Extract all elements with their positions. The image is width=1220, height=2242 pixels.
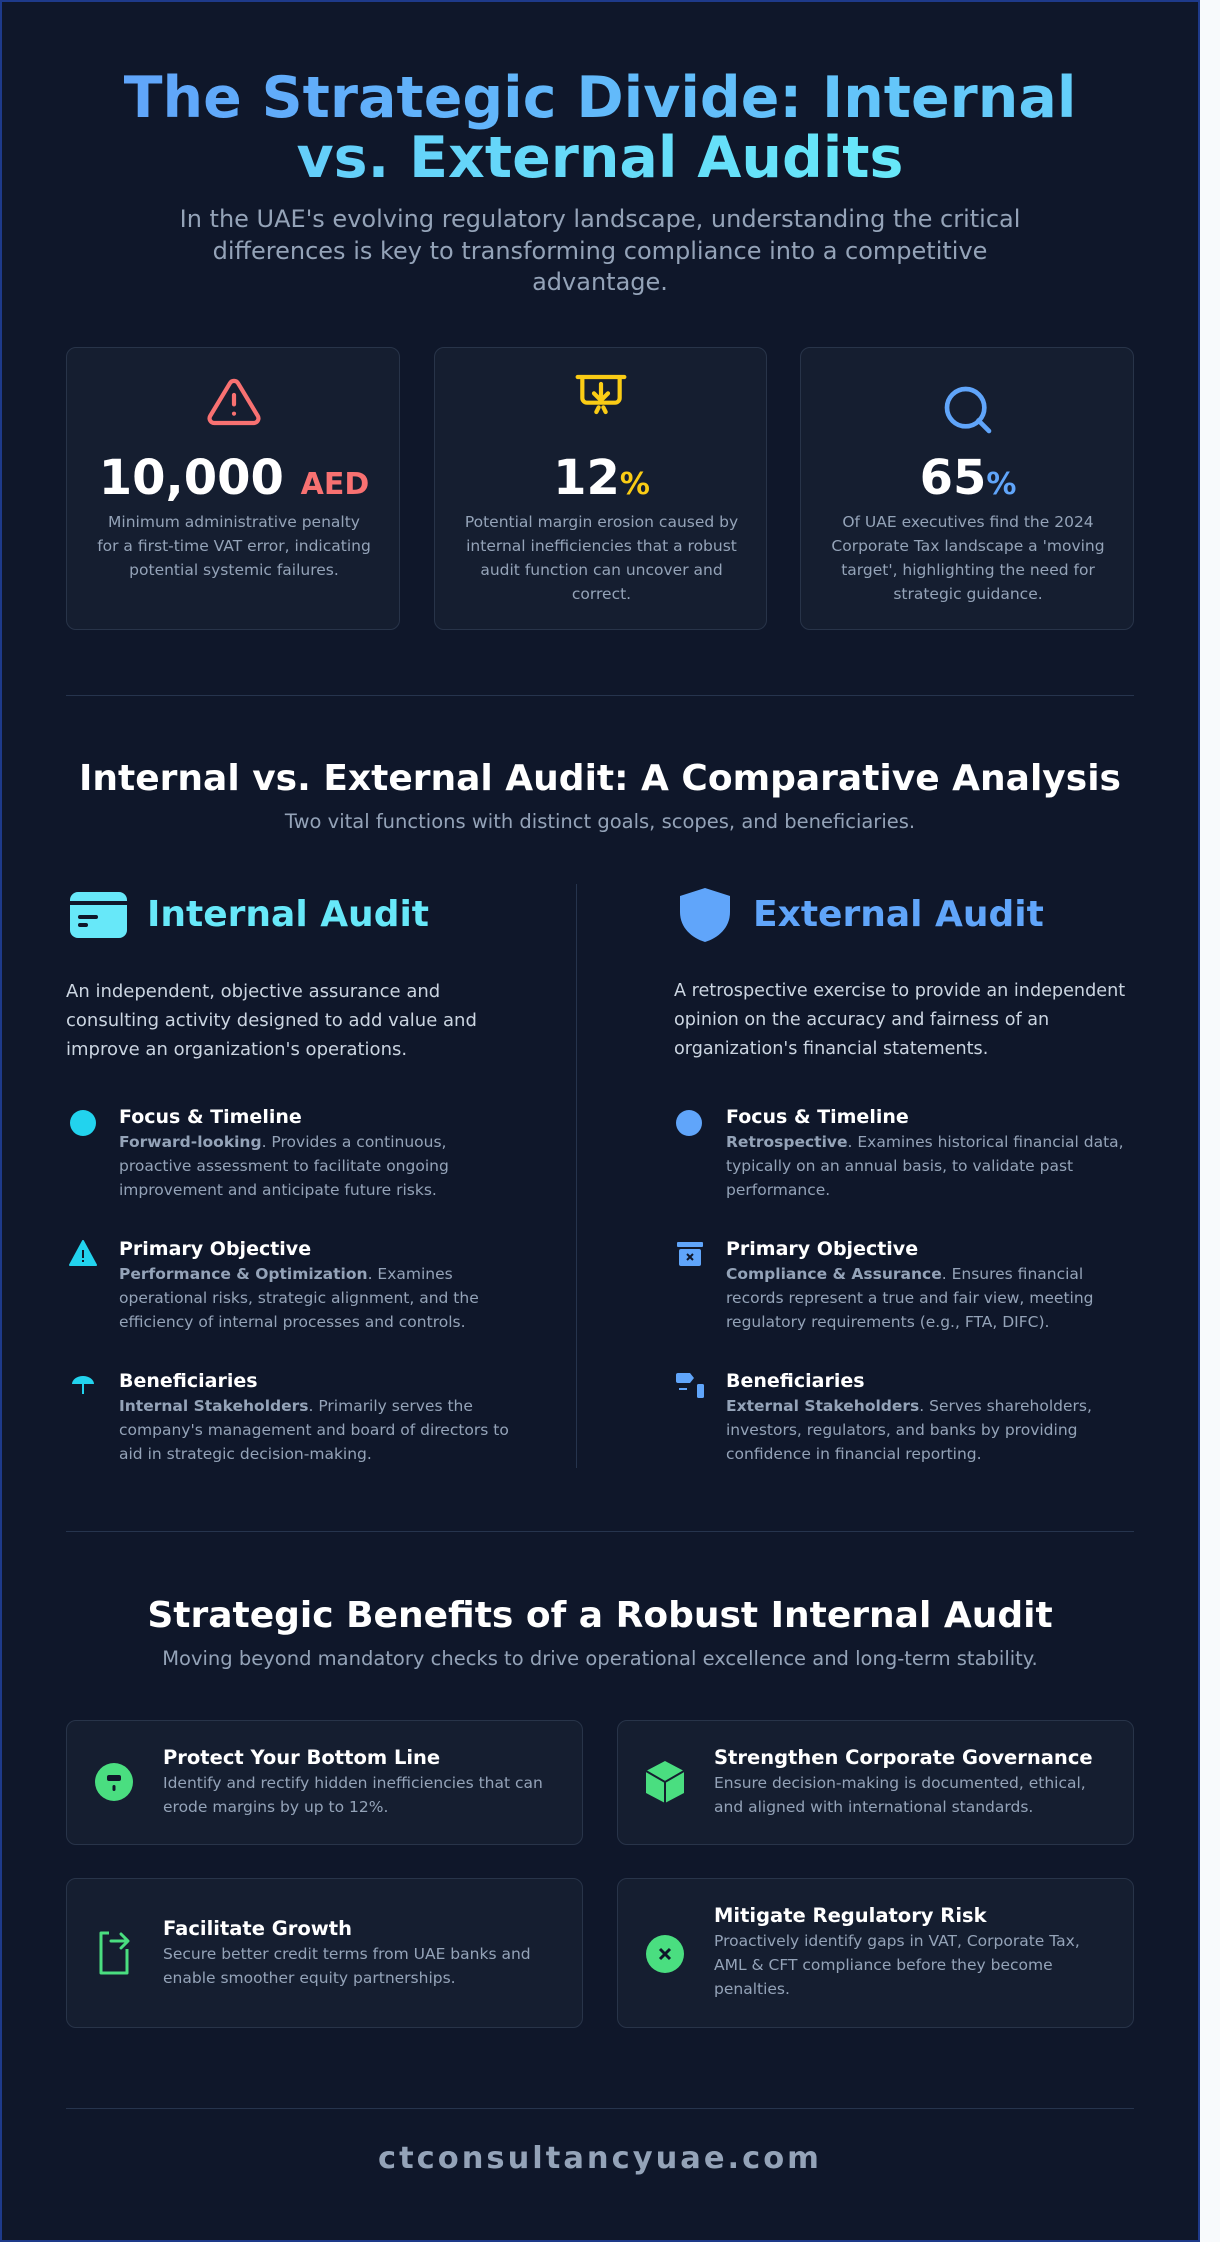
column: external audit (674, 888, 1125, 1463)
title: The Strategic Divide: Internal (124, 65, 1076, 131)
icon: card (70, 892, 127, 938)
benefit card: bottom line (66, 1720, 583, 1845)
stat card: 65% (800, 347, 1134, 630)
text (163, 1746, 543, 1816)
heading: Internal Audit (147, 894, 429, 935)
column: internal audit (66, 892, 509, 1463)
footer: website: ctconsultancyuae.com (378, 2141, 822, 2176)
number: 10,000 AED (99, 450, 369, 506)
text: Secure better credit terms from UAE banks and enable smoother equity partnerships. (163, 1945, 531, 1987)
number: 12% (553, 450, 650, 506)
icon: alert (69, 1240, 97, 1266)
text (163, 1917, 531, 1987)
text: Proactively identify gaps in VAT, Corporate Tax, AML & CFT compliance before they become penalties. (714, 1932, 1080, 1998)
item: objective: Performance & Optimization. Examines operational risks, strategic alignment, and the efficiency of internal processes and controls. (119, 1265, 479, 1331)
item: objective: Compliance & Assurance. Ensures financial records represent a true and fair view, meeting regulatory requirements (e.g., FTA, DIFC). (726, 1265, 1094, 1331)
number: 65% (920, 450, 1016, 506)
section subheading: Two vital functions with distinct goals, scopes, and beneficiaries. (285, 810, 915, 833)
description: Minimum administrative penalty for a first-time VAT error, indicating potential systemic failures. (97, 513, 371, 579)
benefit card: regulatory risk (617, 1878, 1134, 2028)
item: objective: Primary Objective (726, 1238, 918, 1260)
icon: magnifier (944, 386, 992, 434)
text: Protect Your Bottom Line (163, 1746, 440, 1769)
icon: exit (100, 1932, 130, 1974)
text: Ensure decision-making is documented, ethical, and aligned with international standards. (714, 1774, 1086, 1816)
item: beneficiaries: External Stakeholders. Serves shareholders, investors, regulators, and banks by providing confidence in financial reporting. (726, 1397, 1092, 1463)
stat card: 10,000 AED (66, 347, 400, 630)
icon: dot (676, 1110, 702, 1136)
icon: umbrella (72, 1376, 94, 1394)
section heading: comparison: Internal vs. External Audit: A Comparative Analysis (79, 758, 1121, 799)
subtitle: In the UAE's evolving regulatory landscape, understanding the critical differences is key to transforming compliance into a competitive advantage. (180, 205, 1020, 296)
text: Facilitate Growth (163, 1917, 352, 1940)
description: A retrospective exercise to provide an independent opinion on the accuracy and fairness of an organization's financial statements. (674, 981, 1125, 1059)
icon: green circle (95, 1763, 133, 1801)
description: An independent, objective assurance and consulting activity designed to add value and improve an organization's operations. (66, 981, 477, 1060)
section heading: benefits: Strategic Benefits of a Robust Internal Audit (147, 1595, 1053, 1636)
text (714, 1746, 1093, 1816)
item: beneficiaries: Beneficiaries (726, 1370, 865, 1392)
title: vs. External Audits (297, 125, 903, 191)
icon: archive (677, 1242, 703, 1266)
icon: dot (70, 1110, 96, 1136)
heading: External Audit (753, 894, 1044, 935)
description: Of UAE executives find the 2024 Corporate Tax landscape a 'moving target', highlighting the need for strategic guidance. (831, 513, 1105, 603)
item: beneficiaries: Internal Stakeholders. Primarily serves the company's management and board of directors to aid in strategic decision-making. (119, 1397, 509, 1463)
item: focus: Focus & Timeline (119, 1106, 302, 1128)
icon: warning triangle (207, 378, 261, 426)
stat card: 12% (434, 347, 767, 630)
text: Mitigate Regulatory Risk (714, 1904, 987, 1927)
item: focus: Retrospective. Examines historical financial data, typically on an annual basis, to validate past performance. (726, 1133, 1124, 1199)
benefit card: growth (66, 1878, 583, 2028)
item: objective: Primary Objective (119, 1238, 311, 1260)
benefit card: governance (617, 1720, 1134, 1845)
icon: people (676, 1373, 704, 1398)
item: beneficiaries: Beneficiaries (119, 1370, 258, 1392)
title (124, 65, 1076, 191)
section subheading: Moving beyond mandatory checks to drive operational excellence and long-term stability. (162, 1647, 1038, 1670)
icon: presentation down (576, 374, 626, 414)
item: focus: Focus & Timeline (726, 1106, 909, 1128)
icon: cube (646, 1761, 684, 1802)
icon: shield (680, 888, 730, 942)
text: Identify and rectify hidden inefficiencies that can erode margins by up to 12%. (163, 1774, 543, 1816)
icon: x circle (646, 1935, 684, 1973)
item: focus: Forward-looking. Provides a continuous, proactive assessment to facilitate ongoing improvement and anticipate future risks. (119, 1133, 449, 1199)
text: Strengthen Corporate Governance (714, 1746, 1093, 1769)
description: Potential margin erosion caused by internal inefficiencies that a robust audit function can uncover and correct. (465, 513, 738, 603)
